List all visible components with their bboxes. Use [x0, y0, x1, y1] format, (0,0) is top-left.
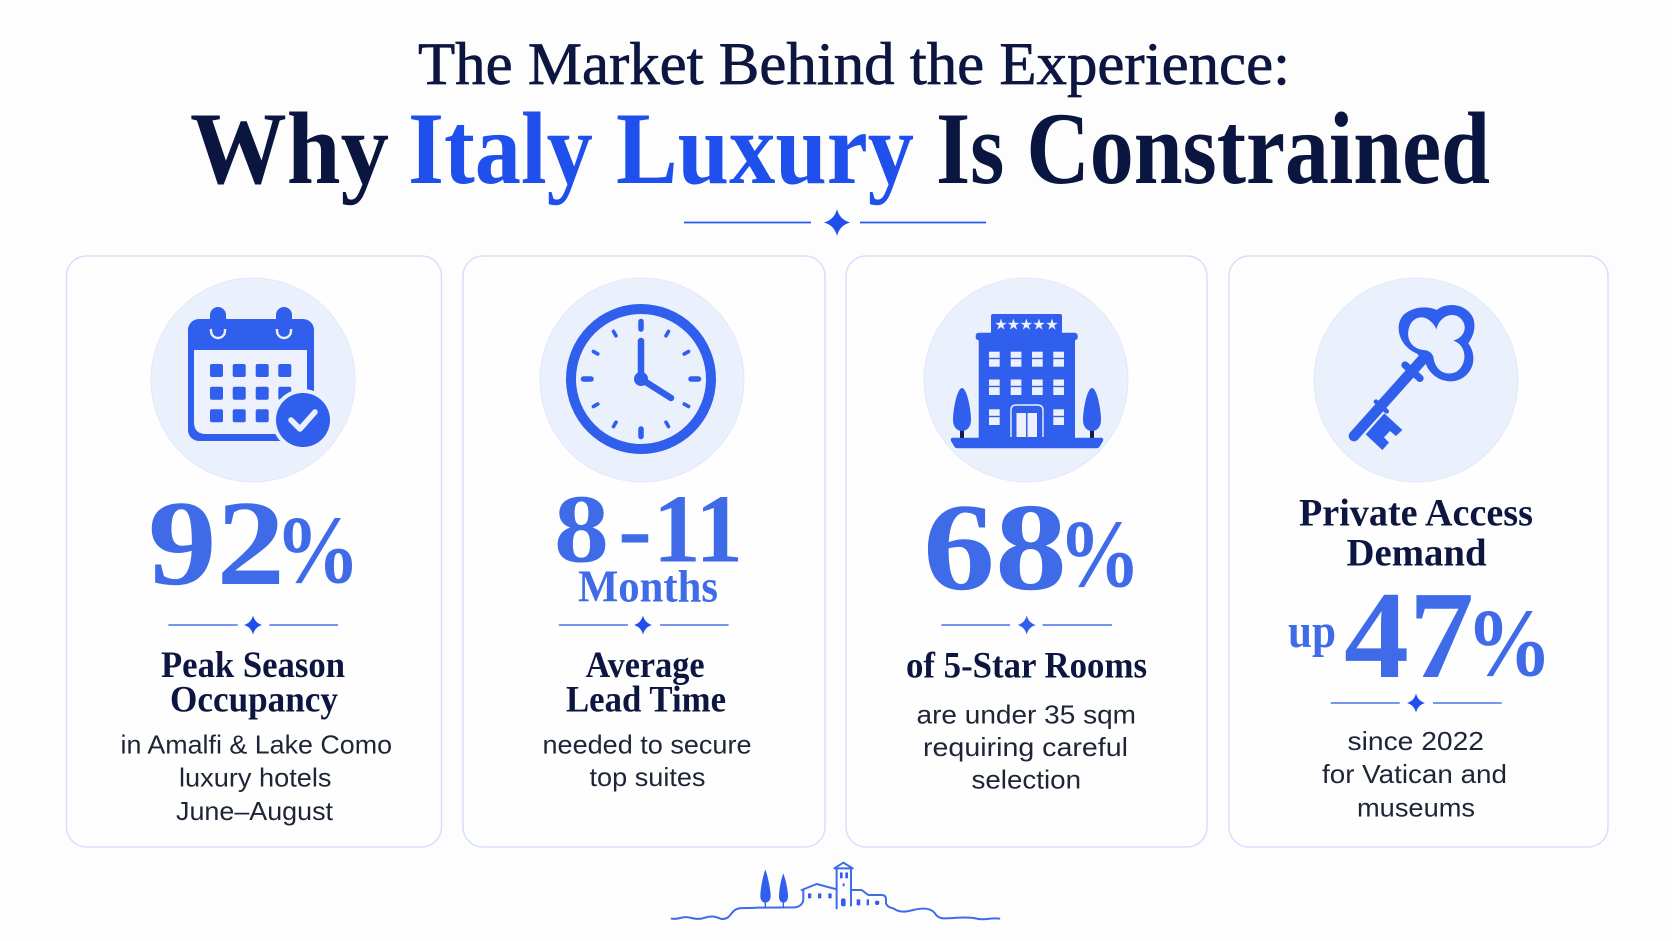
heading: Peak Season — [161, 645, 345, 686]
icon: hotel — [924, 278, 1128, 482]
title divider — [684, 209, 986, 236]
stat: up 47%: % — [1466, 589, 1552, 696]
stat: up 47% — [1288, 567, 1552, 705]
icon: hotel: ★ — [1032, 316, 1046, 334]
stat: 8-11 months: - — [618, 476, 652, 582]
description: requiring careful — [923, 734, 1128, 762]
description: top suites — [590, 764, 706, 792]
divider — [1331, 694, 1502, 712]
icon: clock — [540, 278, 744, 482]
description: are under 35 sqm — [916, 701, 1136, 729]
stat: 92%: % — [275, 496, 360, 603]
headline: Why: Why — [190, 92, 389, 206]
description — [542, 731, 752, 792]
icon: hotel: ★ — [1007, 316, 1020, 334]
panel: average lead time — [463, 256, 825, 847]
stat: 8-11 months: 11 — [653, 476, 743, 582]
heading: Demand — [1346, 532, 1487, 574]
stat: 92%: 92 — [148, 476, 285, 611]
icon: hotel: ★ — [994, 316, 1008, 334]
description — [1322, 728, 1507, 822]
description — [916, 701, 1136, 795]
heading: of 5-Star Rooms — [906, 646, 1147, 686]
stat: 8-11 months — [554, 476, 743, 612]
title — [190, 31, 1490, 206]
headline: Italy Luxury: Italy Luxury — [408, 92, 914, 206]
icon: hotel: ★ — [1045, 316, 1059, 334]
icon: hotel: ★ — [1020, 316, 1033, 334]
description: selection — [972, 767, 1081, 795]
stat: 68% — [923, 479, 1140, 617]
description: needed to secure — [542, 731, 752, 759]
heading: Lead Time — [566, 680, 726, 720]
panel: private access demand — [1229, 256, 1608, 847]
heading: Private Access — [1299, 492, 1533, 535]
heading — [566, 645, 726, 720]
panel: 5-star rooms — [846, 256, 1207, 847]
panel: peak season occupancy — [66, 256, 442, 847]
heading — [161, 645, 345, 720]
stat: 8-11 months: Months — [578, 562, 718, 612]
description: in Amalfi & Lake Como — [120, 731, 392, 759]
divider — [942, 616, 1112, 634]
subtitle: The Market Behind the Experience: — [418, 31, 1290, 97]
description: museums — [1357, 794, 1475, 822]
divider — [559, 616, 729, 634]
stat: up 47%: up — [1288, 605, 1336, 658]
description: since 2022 — [1348, 728, 1484, 756]
heading — [1299, 492, 1533, 574]
icon: key — [1314, 278, 1518, 482]
icon: italian villa landscape — [672, 863, 999, 919]
heading: Average — [586, 645, 704, 686]
stat: 68%: % — [1058, 500, 1140, 607]
headline: Is Constrained: Is Constrained — [936, 92, 1490, 206]
icon: calendar with check — [151, 278, 355, 482]
description — [120, 731, 392, 826]
stat: 8-11 months: 8 — [554, 476, 609, 582]
stat: up 47%: 47 — [1344, 567, 1474, 705]
heading: Occupancy — [170, 680, 338, 720]
description: for Vatican and — [1322, 761, 1507, 789]
description: luxury hotels — [179, 764, 332, 792]
description: June–August — [176, 798, 333, 826]
divider — [168, 616, 338, 634]
stat: 92% — [148, 476, 360, 611]
stat: 68%: 68 — [923, 479, 1067, 617]
